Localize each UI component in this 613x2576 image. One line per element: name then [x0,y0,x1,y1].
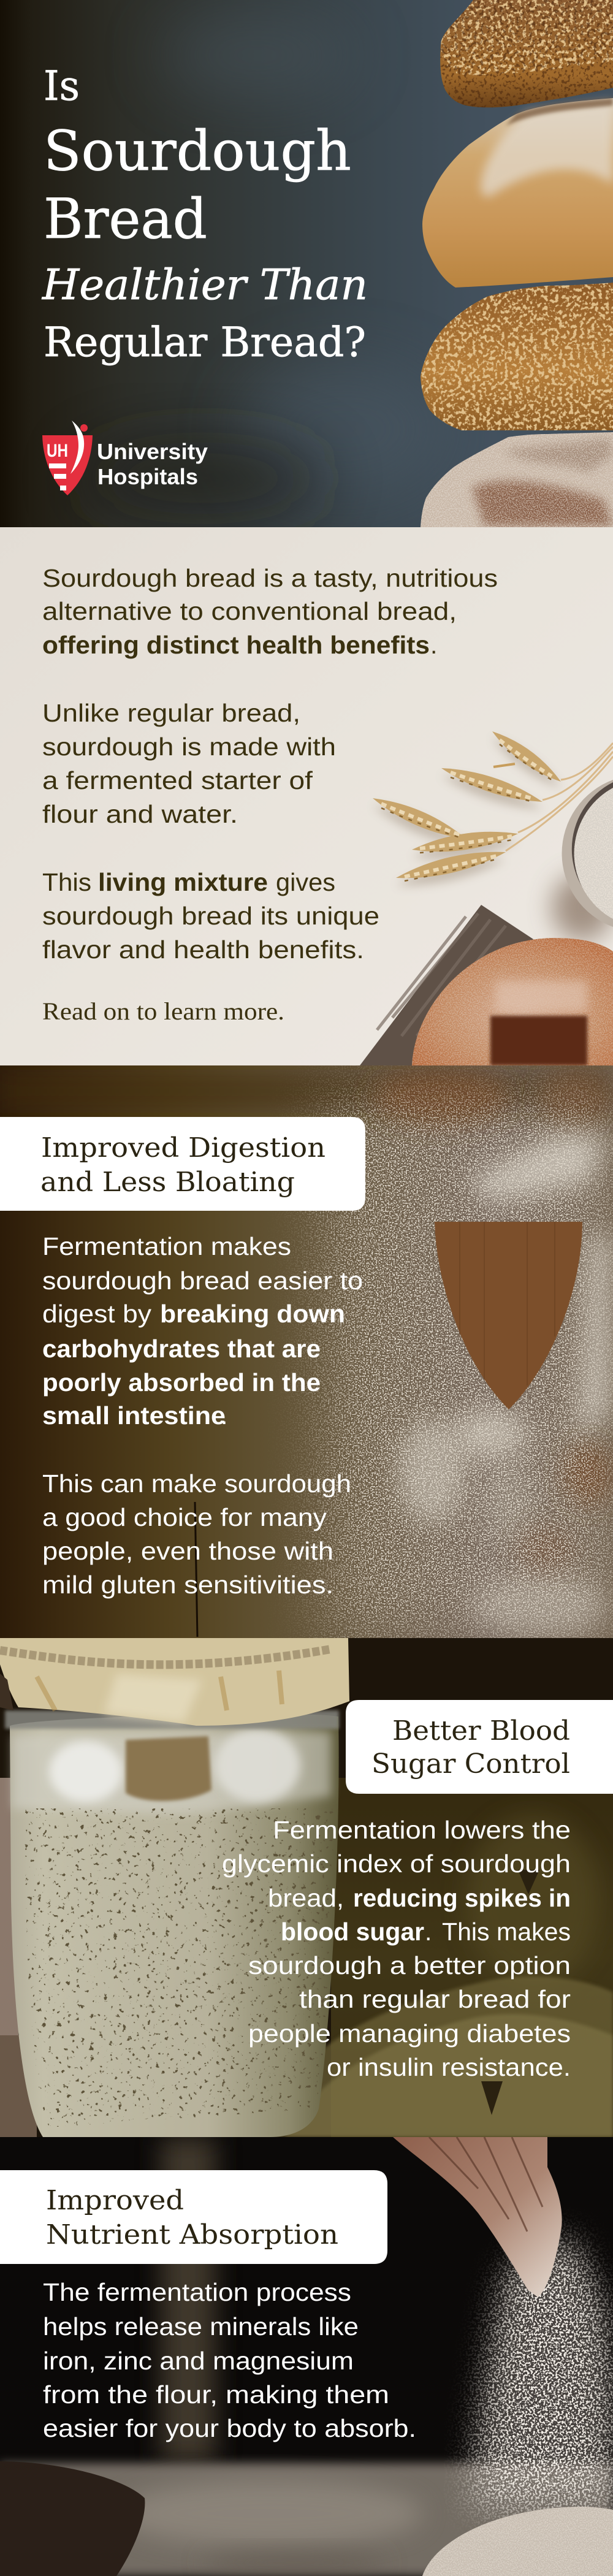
illustration: round loaf [412,938,613,1065]
heading card: Better Blood [392,1715,570,1747]
panel: hero [0,0,613,527]
hero background [0,0,613,527]
illustration: jar cloth cover [0,1638,349,1726]
blood sugar text: bread, [268,1884,344,1912]
nutrient text: from the flour, making them [43,2380,389,2409]
intro text: gives [276,868,335,896]
heading card: Improved Digestion [41,1132,326,1164]
digestion text [42,1232,363,1599]
nutrient text: The fermentation process [43,2278,351,2306]
nutrient text [43,2278,416,2442]
nutrient text: iron, zinc and magnesium [43,2347,354,2375]
intro text: a fermented starter of [42,766,313,795]
loaf: rustic floured [421,432,613,527]
intro text: This [42,868,91,896]
wood shield shape [435,1222,582,1409]
heading card [0,2170,387,2264]
blood sugar text: Fermentation lowers the [273,1816,571,1844]
intro text: flour and water. [42,800,238,828]
intro text: . [430,631,437,659]
blood sugar text: or insulin resistance. [327,2053,571,2081]
blood sugar text: than regular bread for [299,1985,571,2013]
title: Bread [44,187,207,251]
panel: introduction [0,527,613,1065]
digestion text: . [221,1401,227,1430]
intro text: alternative to conventional bread, [42,597,457,625]
intro text: flavor and health benefits. [42,936,364,964]
digestion text: a good choice for many [42,1503,327,1531]
digestion text: poorly absorbed in the [42,1368,321,1397]
nutrient text: helps release minerals like [43,2312,359,2341]
digestion text: Fermentation makes [42,1232,291,1260]
blood sugar text: This makes [442,1918,571,1946]
loaf: seeded golden [421,283,613,430]
logo wordmark: Hospitals [97,464,198,489]
digestion text: This can make sourdough [42,1469,351,1498]
title: Is [44,63,80,110]
intro text: sourdough is made with [42,733,336,761]
digestion text: people, even those with [42,1537,333,1565]
logo wordmark: University [97,439,208,464]
title: Healthier Than [41,261,368,310]
digestion text: breaking down [160,1300,345,1328]
nutrient background [0,2137,613,2576]
illustration: flour stream [472,2238,613,2507]
title: Regular Bread? [44,319,366,366]
illustration: starter jar [5,1710,339,2137]
blood sugar text: glycemic index of sourdough [222,1850,571,1878]
intro text: sourdough bread its unique [42,902,379,930]
blood sugar text: people managing diabetes [248,2019,571,2048]
blood sugar text: reducing spikes in [353,1884,571,1912]
panel: improved digestion [0,1065,613,1638]
logo: University Hospitals [42,421,208,495]
heading card: Sugar Control [371,1748,570,1780]
heading card: Improved [46,2185,184,2216]
illustration: bowl [0,2461,145,2576]
title: Sourdough [44,119,351,183]
digestion text: small intestine [42,1401,226,1430]
heading card: Nutrient Absorption [46,2219,338,2250]
illustration: cutting board [360,905,533,1065]
logo wordmark [97,439,208,489]
intro text: living mixture [98,868,268,896]
icon: shield stripes [49,463,66,490]
illustration: wheat [373,731,613,885]
panel: better blood sugar control [0,1638,613,2137]
blood sugar text: blood sugar [281,1918,424,1946]
heading card [0,1117,365,1211]
digestion text: mild gluten sensitivities. [42,1571,333,1599]
panel: improved nutrient absorption [0,2137,613,2576]
illustration: flour bowl [552,780,613,941]
intro text: Sourdough bread is a tasty, nutritious [42,564,498,592]
intro text: Unlike regular bread, [42,699,300,727]
icon: shield letters: UH [47,441,68,461]
loaf: top seeded [440,0,613,107]
blood sugar text: sourdough a better option [248,1951,571,1980]
heading card: and Less Bloating [40,1167,295,1198]
icon: red dot [80,424,88,432]
icon: red shield [42,435,93,495]
digestion background: floured wood [0,1065,613,1638]
illustration: hand [393,2137,562,2297]
loaf: golden floured [422,98,613,288]
illustration: flour mound [422,2507,613,2576]
digestion text: carbohydrates that are [42,1335,321,1363]
title [41,63,368,366]
intro text: offering distinct health benefits [42,631,430,659]
intro text: Read on to learn more. [42,997,284,1025]
icon: shield arc [70,421,84,474]
blood sugar text: . [425,1918,432,1946]
blood sugar background [0,1638,613,2137]
bread stack [421,0,613,527]
intro background [0,527,613,1065]
digestion text: sourdough bread easier to [42,1267,363,1295]
digestion text: digest by [42,1300,152,1328]
blood sugar text [222,1816,571,2081]
intro text [42,564,498,1025]
nutrient text: easier for your body to absorb. [43,2414,416,2442]
heading card [346,1700,613,1794]
